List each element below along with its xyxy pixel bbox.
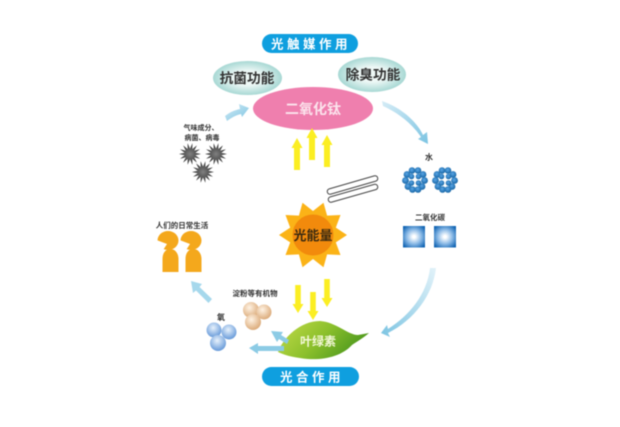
label: deodorizing function: 除臭功能 (346, 66, 401, 82)
ellipse: titanium dioxide (253, 87, 373, 130)
arrow: chlorophyll to oxygen (249, 343, 284, 354)
icon: UV lamp tubes (330, 178, 375, 200)
title: photocatalysis pill (262, 34, 358, 53)
title: photosynthesis pill: 光合作用 (280, 370, 344, 384)
icon: water molecules (402, 167, 458, 193)
text: oxygen: 氧 (217, 312, 225, 322)
arrow: organics to chlorophyll (271, 331, 289, 344)
icon: carbon dioxide squares (403, 226, 456, 248)
arrows: light down to chlorophyll (292, 279, 332, 320)
title: photosynthesis pill (262, 367, 359, 386)
icon: chlorophyll leaf: 叶绿素 (300, 334, 336, 348)
arrow: carbon dioxide to chlorophyll (381, 268, 436, 337)
arrows: light up to titanium dioxide (292, 128, 332, 170)
icon: two people (156, 231, 202, 272)
text: odors, bacteria, viruses: 病菌、病毒 (184, 133, 220, 142)
icon: sun with light energy: 光能量 (293, 228, 333, 243)
text: starch and organics: 淀粉等有机物 (232, 288, 278, 298)
label: antibacterial function (213, 61, 282, 95)
ellipse: titanium dioxide: 二氧化钛 (285, 101, 341, 117)
text: daily life: 人们的日常生活 (156, 220, 209, 230)
label: deodorizing function (338, 57, 406, 92)
arrow: titanium dioxide to water (382, 101, 428, 144)
text: odors, bacteria, viruses (184, 123, 220, 142)
icon: sun with light energy (279, 203, 347, 267)
text: water: 水 (425, 152, 433, 162)
label: antibacterial function: 抗菌功能 (220, 70, 275, 86)
icon: oxygen balls (206, 322, 236, 351)
icon: spiky pollutants (179, 143, 227, 183)
text: odors, bacteria, viruses: 气味成分、 (184, 123, 218, 132)
text: carbon dioxide: 二氧化碳 (415, 212, 445, 222)
icon: chlorophyll leaf (278, 321, 369, 359)
arrow: pollutants to titanium dioxide (225, 104, 249, 121)
icon: organic matter balls (243, 302, 272, 330)
arrow: oxygen to daily life (191, 281, 212, 303)
title: photocatalysis pill: 光触媒作用 (271, 36, 351, 52)
